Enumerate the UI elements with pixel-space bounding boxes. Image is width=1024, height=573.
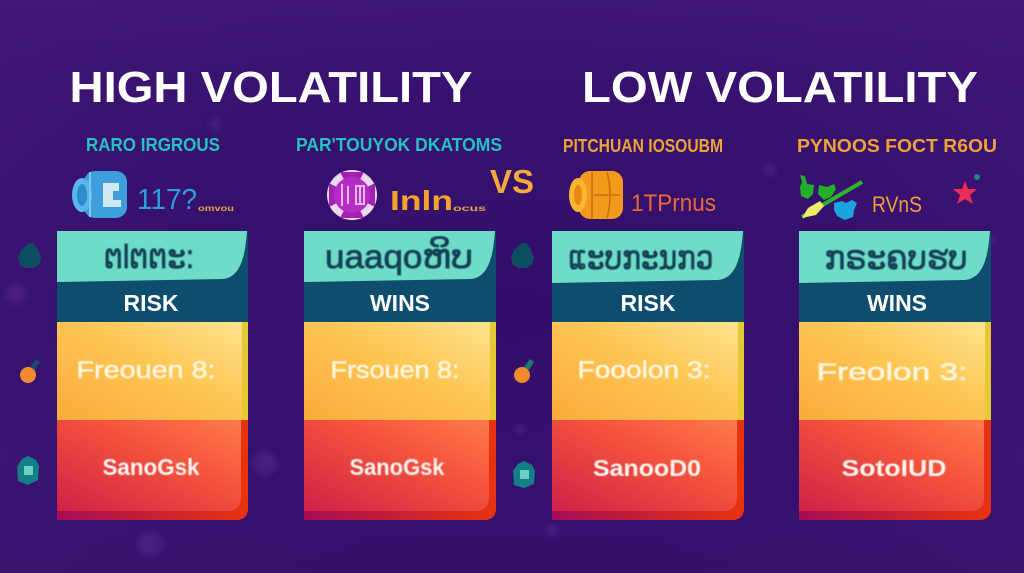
red block (57, 420, 248, 520)
panel: high wins card (304, 231, 496, 520)
icon: party confetti (800, 175, 862, 220)
yellow block: Freolon 3: (816, 359, 968, 386)
panel: low wins card (799, 231, 991, 520)
banner text: ກຣະຄບຮບ (824, 239, 968, 276)
icon: blue slot reel (72, 171, 127, 218)
column 2 heading: PAR'TOUYOK DKATOMS (296, 135, 502, 155)
yellow block: Frsouen 8: (330, 357, 460, 384)
title: low volatility: LOW VOLATILITY (582, 63, 978, 112)
dark band (552, 231, 744, 322)
rtp value: 117? (137, 184, 197, 216)
banner text: ແະບກະນກວ (568, 239, 714, 276)
red block: SanooD0 (593, 455, 701, 481)
yellow block: Fooolon 3: (578, 357, 710, 384)
banner text: uaaqoຫິບ (325, 235, 473, 275)
teal banner (304, 231, 495, 282)
column 4 heading: PYNOOS FOCT R6OU (797, 136, 997, 156)
dark band (304, 231, 496, 322)
icon: star (953, 181, 977, 204)
column 1 heading: RARO IRGROUS (86, 135, 220, 155)
row icon: teal badge left (17, 456, 39, 485)
red block (799, 420, 991, 520)
red block (552, 420, 744, 520)
rtp unit: omvou (198, 204, 234, 213)
row icon: orange bag center (514, 359, 534, 383)
vs label: VS (490, 163, 534, 200)
yellow block: Freouen 8: (76, 357, 216, 384)
column 1 header (72, 135, 234, 218)
wins label: RVnS (872, 192, 922, 217)
row icon: orange bag left (20, 359, 40, 383)
column 3 header (563, 136, 723, 219)
wins label: WINS (370, 290, 430, 316)
win value: Inln (390, 185, 453, 216)
red block: SotoIUD (842, 455, 946, 481)
wins label: WINS (867, 290, 927, 316)
yellow block (799, 322, 991, 420)
title: high volatility: HIGH VOLATILITY (70, 63, 472, 112)
teal banner (57, 231, 247, 282)
icon: small sparkle (974, 174, 980, 180)
row icon: teal bag center (511, 243, 534, 268)
red block: SanoGsk (350, 454, 445, 480)
row icon: teal badge center (513, 461, 535, 488)
red block: SanoGsk (102, 454, 200, 480)
yellow block (57, 322, 248, 420)
icon: orange reel (569, 171, 623, 219)
dark band (57, 231, 248, 322)
dark band (799, 231, 991, 322)
row icon: teal bag left (18, 243, 41, 268)
yellow block (304, 322, 496, 420)
rtp value: 1TPrnus (631, 190, 716, 217)
win unit: ocus (453, 204, 487, 213)
column 2 header (296, 135, 502, 220)
yellow block (552, 322, 744, 420)
column 4 header (797, 136, 997, 220)
icon: purple chip (327, 170, 377, 220)
column 3 heading: PITCHUAN IOSOUBM (563, 136, 723, 156)
risk label: RISK (621, 290, 676, 316)
panel: high risk card (57, 231, 248, 520)
teal banner (799, 231, 990, 283)
risk label: RISK (124, 290, 179, 316)
teal banner (552, 231, 743, 283)
panel: low risk card (552, 231, 744, 520)
banner text: ຕlຕຕະ: (104, 238, 194, 275)
red block (304, 420, 496, 520)
